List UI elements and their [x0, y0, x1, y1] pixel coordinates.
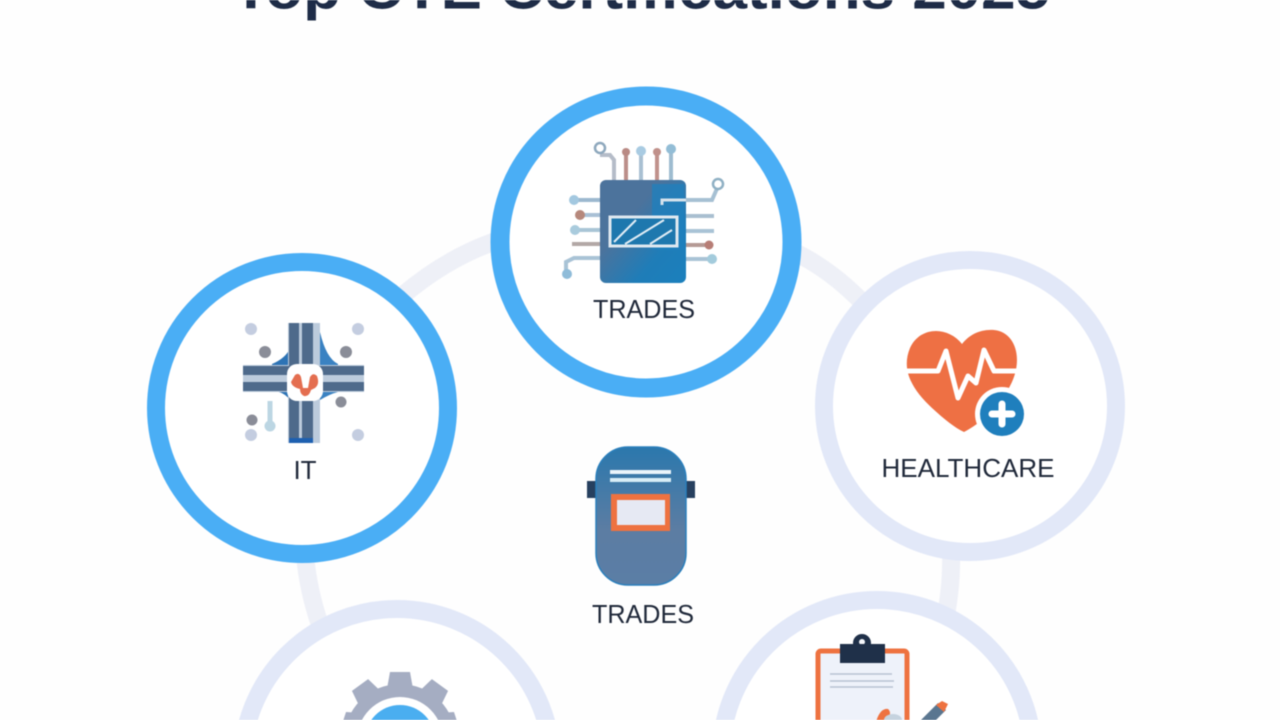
label: TRADES: TRADES	[593, 294, 695, 324]
icon: gear	[338, 672, 462, 720]
panel: top TRADES circle	[500, 96, 792, 388]
connectors between circles	[305, 238, 951, 625]
icon: heart with pulse and plus	[906, 330, 1029, 441]
label: IT: IT	[293, 455, 317, 485]
icon: clipboard and pen	[818, 634, 948, 720]
panel: IT circle	[156, 262, 448, 554]
panel: bottom-right circle	[721, 600, 1033, 720]
icon: network cross	[243, 323, 364, 443]
panel: bottom-left circle	[242, 609, 552, 720]
icon: circuit chip	[562, 143, 723, 283]
label: HEALTHCARE: HEALTHCARE	[882, 453, 1054, 483]
label: TRADES: TRADES	[592, 599, 694, 629]
icon: welding helmet	[587, 447, 695, 585]
panel: HEALTHCARE circle	[824, 260, 1116, 552]
panel: centre TRADES	[587, 447, 695, 629]
